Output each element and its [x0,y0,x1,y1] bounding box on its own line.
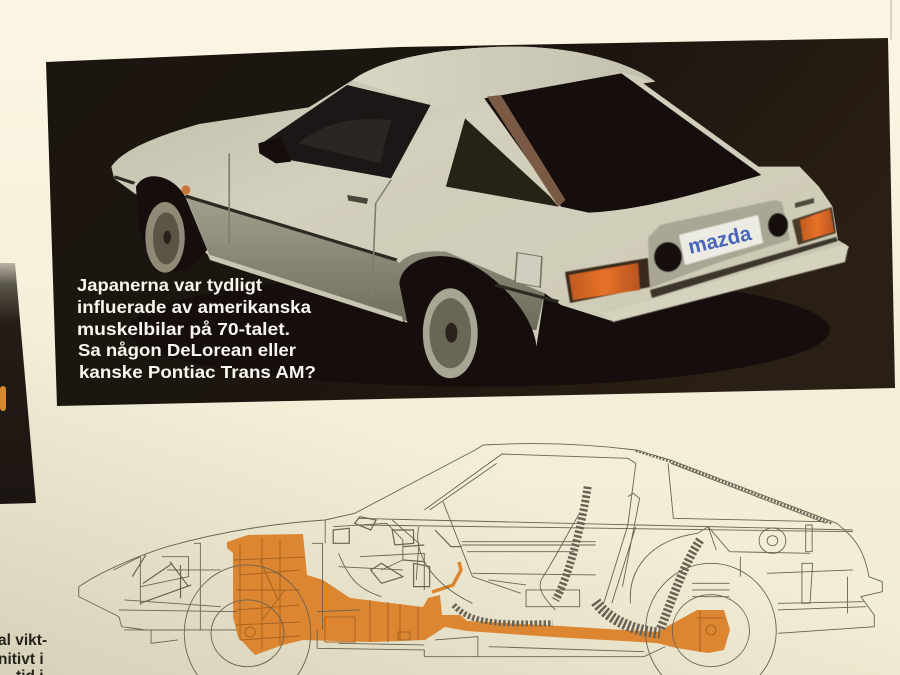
engine bay clutter [132,517,462,603]
sill strip [207,254,403,322]
quarter window [446,118,558,207]
car [111,47,849,387]
rear seat speaker [759,525,812,553]
caption: kanske Pontiac Trans AM? [79,362,316,382]
photo background [46,38,895,406]
front wheel [145,202,185,273]
caption: Japanerna var tydligt [77,275,262,295]
caption: muskelbilar på 70-talet. [77,319,290,339]
rear end of car [562,198,848,322]
fuel flap [515,253,542,287]
photo: Mazda RX-7 rear three-quarter view [46,38,895,406]
caption: influerade av amerikanska [77,297,311,317]
photo from the neighbouring article [0,263,36,504]
door and window frames [325,454,853,603]
roof [353,47,655,110]
body outline [79,444,882,633]
hatch strut [636,451,831,523]
rear panel [648,200,790,288]
ground shadow [128,273,830,387]
lower side panel [185,195,545,330]
licence plate logo: mazda [686,222,754,259]
right tail lamp [792,207,836,245]
rear suspension [692,557,866,613]
door lines [229,153,391,297]
body side trim [114,177,558,302]
rear wheel arch [399,256,536,383]
door window [259,85,431,178]
body text fragment from the neighbouring column [0,632,47,675]
caption: Sa någon DeLorean eller [78,340,296,360]
licence plate background [679,215,763,265]
rear wheel [423,288,478,378]
rear window [484,73,761,213]
cutaway drawing of the car [79,444,882,675]
wheels and arches [184,563,776,675]
mirror [258,137,291,163]
side badge [182,185,190,195]
floor and exhaust [317,580,665,657]
door handle [347,195,368,204]
front wheel arch [136,176,207,273]
car body [111,47,849,360]
bumper [562,244,848,322]
rear seat [596,540,700,633]
caption [77,275,316,382]
under-deck slit [650,237,838,298]
front seat [454,487,588,623]
front engine bay [114,520,424,643]
orange drivetrain [227,534,730,655]
left tail lamp [565,258,650,303]
rear recesses [654,242,682,272]
badge [795,198,814,208]
rear pillar strip [487,95,565,207]
